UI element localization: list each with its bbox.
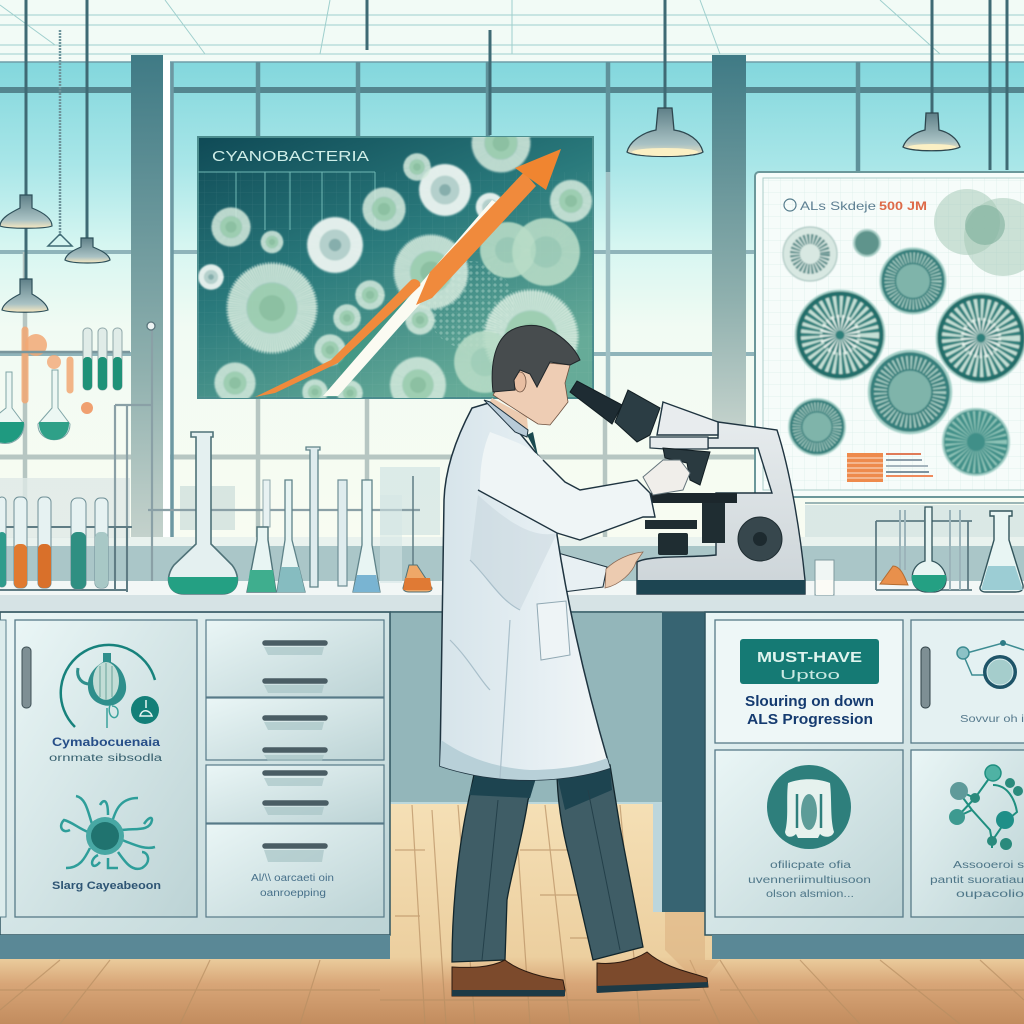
drawer handles <box>265 643 326 846</box>
lamp 3 <box>2 279 48 312</box>
poster title: CYANOBACTERIA <box>212 148 369 165</box>
bench top <box>0 581 1024 612</box>
drawer caption: oanroepping <box>260 888 326 899</box>
trousers <box>452 765 643 962</box>
panel heading <box>745 693 874 728</box>
round flask <box>168 432 238 594</box>
sub stage <box>645 520 697 529</box>
specimen discs <box>783 189 1024 475</box>
head housing <box>657 402 718 435</box>
stage column <box>702 503 725 543</box>
teal banner: MUST-HAVE <box>757 649 862 666</box>
orange flask <box>403 476 432 592</box>
door caption bottom: Slarg Cayeabeoon <box>52 880 161 892</box>
sleeve <box>478 432 655 540</box>
focus knob <box>738 517 782 561</box>
structural columns <box>131 55 746 540</box>
drawer caption <box>251 873 334 899</box>
tie <box>527 432 538 456</box>
coat pocket <box>537 601 570 660</box>
test tube rack <box>0 497 132 592</box>
floor <box>0 800 1024 1024</box>
panel: network icon: Sovvur oh i <box>960 714 1024 725</box>
panel caption: uvenneriimultiusoon <box>748 875 871 886</box>
lamp 5 <box>903 113 960 151</box>
door caption top <box>49 735 163 764</box>
panel caption <box>748 860 871 900</box>
arm <box>650 437 708 449</box>
door handle <box>22 647 31 708</box>
stage <box>648 493 737 503</box>
ear <box>514 372 526 392</box>
upper left glassware <box>0 322 420 590</box>
window frames <box>0 62 1024 540</box>
drawers <box>206 620 384 917</box>
camera box <box>615 390 660 442</box>
base strip <box>637 580 805 594</box>
far arm <box>558 553 607 592</box>
panel: molecule icon: Assooeroi s <box>953 860 1024 871</box>
panel caption: olson alsmion... <box>766 889 854 900</box>
conical flask <box>247 480 276 592</box>
panel: must-have <box>715 620 903 743</box>
panel: spine icon <box>715 750 903 917</box>
panel: molecule icon: oupacolio <box>956 889 1024 900</box>
panel: network icon <box>911 620 1024 743</box>
shelf <box>0 351 130 353</box>
mini legend bars <box>847 453 933 482</box>
objective <box>663 448 710 485</box>
door caption top: ornmate sibsodla <box>49 753 163 764</box>
drawer handle shadows <box>264 647 324 862</box>
poster: ALS microscopy <box>755 172 1024 497</box>
poster heading <box>784 199 927 213</box>
lamp 2 <box>65 238 110 263</box>
small beaker <box>815 560 834 595</box>
microscope <box>570 381 805 594</box>
tall flask <box>277 480 305 592</box>
icon: tentacled cell <box>61 796 155 869</box>
poster heading: 500 JM <box>879 199 927 213</box>
flasks and cylinders on left bench <box>168 432 432 594</box>
hanging flasks <box>0 370 70 444</box>
condenser cylinder <box>658 533 688 555</box>
retort stand <box>115 322 420 590</box>
far hand <box>605 552 643 588</box>
green tubes <box>83 328 122 390</box>
poster: cyanobacteria growth <box>197 136 594 399</box>
coat folds <box>440 740 610 780</box>
face <box>493 360 570 425</box>
icon: flask cell <box>61 645 159 728</box>
shirt collar <box>484 400 528 437</box>
microscope body <box>637 422 805 594</box>
neck <box>488 398 528 430</box>
right bench glassware <box>815 507 1023 595</box>
cylinders <box>306 447 320 587</box>
orange splashes <box>25 330 70 400</box>
door panel <box>15 620 197 917</box>
icon: lens node <box>957 640 1024 689</box>
panel: molecule icon <box>911 750 1024 917</box>
drawer caption: Al/\\ oarcaeti oin <box>251 873 334 884</box>
lab coat <box>440 402 610 780</box>
pendant lights <box>0 0 1007 312</box>
left cabinet <box>0 612 390 959</box>
poster blobs <box>198 137 593 398</box>
teal banner: Uptoo <box>780 667 840 682</box>
poster heading: ALs Skdeje <box>800 199 876 213</box>
right cabinet <box>705 612 1024 959</box>
window background <box>0 55 1024 600</box>
tall conical flask <box>980 511 1023 592</box>
door caption top: Cymabocuenaia <box>52 735 160 749</box>
panel heading: ALS Progression <box>747 711 873 728</box>
lamp 4 <box>627 108 703 156</box>
panel heading: Slouring on down <box>745 693 874 710</box>
back cabinet under bench <box>390 610 705 912</box>
teal banner <box>740 639 879 684</box>
hair <box>492 325 580 392</box>
orange dish <box>880 566 908 585</box>
green flask <box>912 507 946 592</box>
panel: molecule icon: pantit suoratiau <box>930 875 1024 886</box>
shoes <box>452 952 708 996</box>
gloved hand <box>643 460 690 495</box>
panel caption: ofilicpate ofia <box>770 860 852 871</box>
growth arrow <box>255 149 561 397</box>
scientist <box>440 325 708 996</box>
lamp 1 <box>0 195 52 228</box>
eyepiece <box>570 381 622 424</box>
ceiling <box>0 0 1024 62</box>
slim flask <box>353 480 380 592</box>
lower back shelf <box>0 467 1024 590</box>
